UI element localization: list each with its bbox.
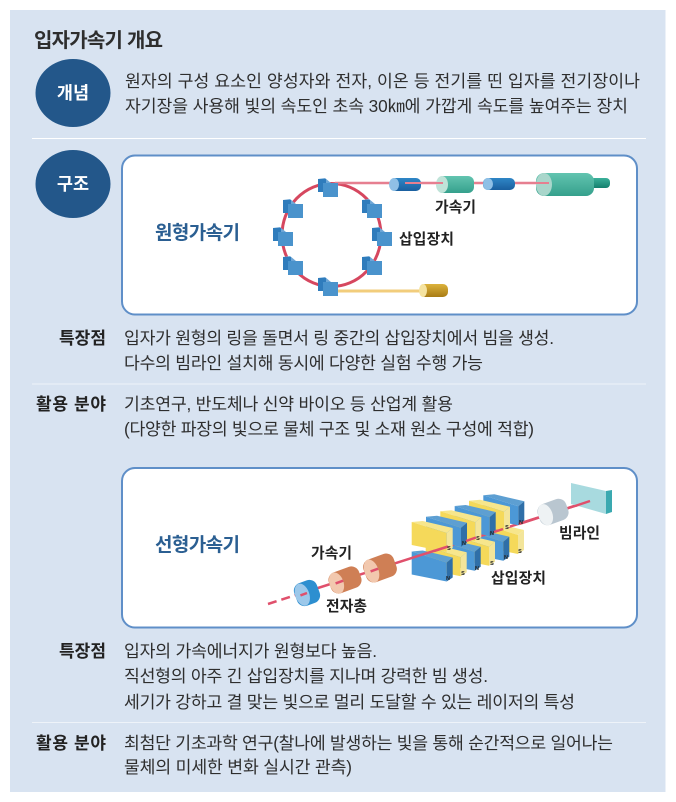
visible beam between magnets bbox=[434, 501, 590, 551]
applications of linear accelerator: 최첨단 기초과학 연구(찰나에 발생하는 빛을 통해 순간적으로 일어나는 bbox=[124, 733, 613, 753]
label: beamline: 빔라인 bbox=[559, 525, 600, 542]
pole letters: S bbox=[518, 549, 522, 555]
features of linear accelerator: 입자의 가속에너지가 원형보다 높음. bbox=[124, 641, 377, 661]
pole letters: S bbox=[490, 561, 494, 567]
injector line bbox=[338, 284, 448, 297]
applications of circular accelerator: 기초연구, 반도체나 신약 바이오 등 산업계 활용 bbox=[124, 394, 453, 414]
panel: linear accelerator diagram bbox=[122, 468, 637, 628]
ring beam bbox=[282, 184, 381, 286]
pole letters: S bbox=[461, 571, 465, 577]
label: insertion device: 삽입장치 bbox=[491, 570, 546, 587]
badge: 개념: 개념 bbox=[57, 83, 89, 103]
applications of linear accelerator bbox=[36, 733, 613, 777]
upper magnets bbox=[412, 494, 524, 552]
features of linear accelerator bbox=[59, 641, 575, 712]
accelerator cylinders bbox=[326, 551, 399, 596]
title: 입자가속기 개요 bbox=[34, 29, 163, 52]
pole letters bbox=[446, 520, 523, 582]
beamline cylinder bbox=[535, 497, 571, 527]
applications of linear accelerator: 활용 분야 bbox=[36, 734, 106, 753]
applications of circular accelerator bbox=[36, 394, 534, 439]
label: insertion device: 삽입장치 bbox=[399, 231, 454, 248]
concept description: 원자의 구성 요소인 양성자와 전자, 이온 등 전기를 띤 입자를 전기장이나 bbox=[125, 71, 640, 91]
badge: 개념 bbox=[36, 59, 110, 127]
ring magnets bbox=[273, 178, 392, 296]
applications of linear accelerator: 물체의 미세한 변화 실시간 관측) bbox=[124, 757, 352, 777]
cylinders on the beamline bbox=[389, 173, 610, 196]
pole letters: N bbox=[446, 576, 450, 582]
panel: circular accelerator diagram bbox=[122, 156, 637, 314]
badge: 구조: 구조 bbox=[57, 174, 89, 194]
pole letters: N bbox=[504, 555, 508, 561]
applications of circular accelerator: (다양한 파장의 빛으로 물체 구조 및 소재 원소 구성에 적합) bbox=[124, 419, 534, 439]
features of linear accelerator: 특장점 bbox=[59, 642, 106, 661]
heading: circular accelerator: 원형가속기 bbox=[155, 222, 240, 244]
electron gun bbox=[292, 578, 322, 608]
main beam bbox=[296, 501, 590, 595]
heading: linear accelerator: 선형가속기 bbox=[155, 534, 240, 556]
label: accelerator: 가속기 bbox=[435, 199, 476, 216]
features of linear accelerator: 세기가 강하고 결 맞는 빛으로 멀리 도달할 수 있는 레이저의 특성 bbox=[124, 692, 575, 712]
label: electron gun: 전자총 bbox=[326, 598, 367, 615]
pole letters: S bbox=[476, 536, 480, 542]
badge: 구조 bbox=[36, 150, 110, 218]
features of circular accelerator: 다수의 빔라인 설치해 동시에 다양한 실험 수행 가능 bbox=[124, 353, 483, 373]
pole letters: N bbox=[475, 566, 479, 572]
pole letters: N bbox=[462, 541, 466, 547]
pole letters: S bbox=[505, 525, 509, 531]
features of linear accelerator: 직선형의 아주 긴 삽입장치를 지나며 강력한 빔 생성. bbox=[124, 666, 488, 686]
features of circular accelerator: 입자가 원형의 링을 돌면서 링 중간의 삽입장치에서 빔을 생성. bbox=[124, 328, 554, 348]
pole letters: S bbox=[447, 546, 451, 552]
beam to accelerators bbox=[335, 182, 540, 184]
lower magnets bbox=[412, 523, 524, 582]
concept description bbox=[125, 71, 640, 117]
applications of circular accelerator: 활용 분야 bbox=[36, 395, 106, 414]
screen bbox=[571, 483, 612, 514]
label: accelerator: 가속기 bbox=[311, 545, 352, 562]
pole letters: N bbox=[490, 531, 494, 537]
concept description: 자기장을 사용해 빛의 속도인 초속 30㎞에 가깝게 속도를 높여주는 장치 bbox=[125, 92, 628, 117]
features of circular accelerator bbox=[59, 328, 554, 373]
dashed incoming beam bbox=[268, 595, 296, 604]
features of circular accelerator: 특장점 bbox=[59, 329, 106, 348]
pole letters: N bbox=[519, 520, 523, 526]
